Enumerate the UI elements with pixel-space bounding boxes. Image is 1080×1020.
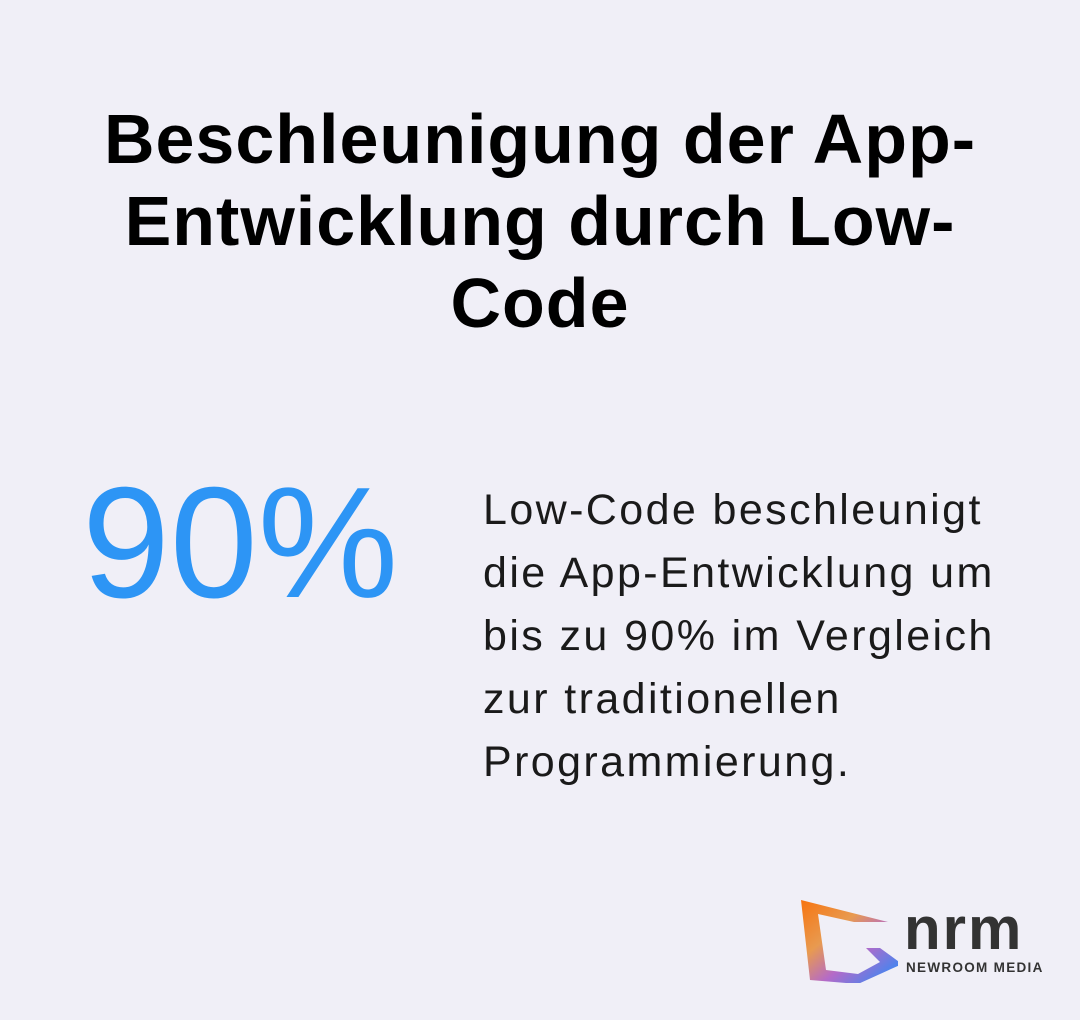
logo text: nrm	[904, 895, 1023, 962]
icon: logo mark	[801, 900, 898, 983]
big stat: 90%	[82, 455, 398, 631]
description text: Programmierung.	[483, 738, 851, 786]
description text: zur traditionellen	[483, 675, 842, 723]
description text: bis zu 90% im Vergleich	[483, 612, 995, 660]
description text: Low-Code beschleunigt	[483, 486, 983, 534]
logo: NEWROOM MEDIA	[906, 960, 1044, 975]
logo	[801, 895, 1044, 983]
title	[104, 100, 976, 342]
description text: die App-Entwicklung um	[483, 549, 995, 597]
description text	[483, 486, 995, 786]
title: Beschleunigung der App-	[104, 100, 976, 178]
title: Entwicklung durch Low-	[125, 182, 955, 260]
title: Code	[450, 264, 630, 342]
